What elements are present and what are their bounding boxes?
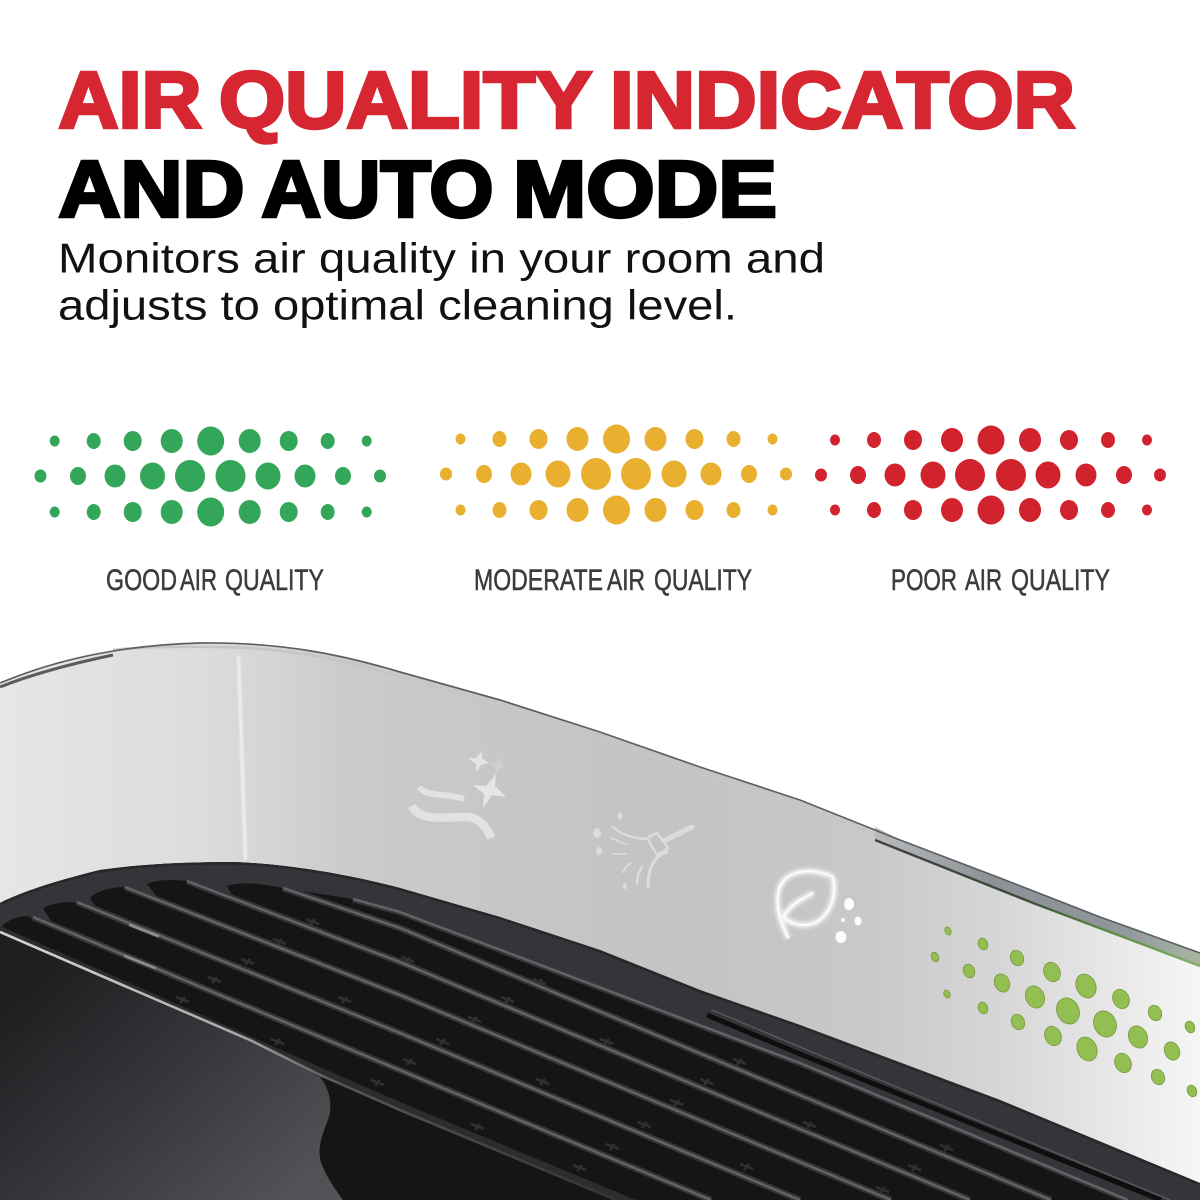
label: moderate air quality: MODERATE: [474, 564, 603, 597]
title line 2: [58, 144, 777, 234]
icon: leaf eco mode: [778, 871, 862, 943]
indicator: good air quality dots: [34, 426, 386, 526]
title line 1: [58, 56, 1075, 144]
green air quality light: [930, 926, 1199, 1098]
label: moderate air quality: AIR: [607, 564, 645, 597]
indicator: poor air quality dots: [815, 426, 1166, 524]
upper wave: [419, 787, 464, 799]
title line 1: INDICATOR: [610, 56, 1075, 144]
label: moderate air quality: [474, 564, 752, 597]
rim left dark segment: [0, 655, 113, 687]
label: moderate air quality: QUALITY: [654, 564, 752, 597]
silver top panel: [0, 643, 1200, 1200]
subtitle: adjusts to optimal cleaning level.: [58, 282, 737, 328]
front panel edge highlight: [0, 932, 616, 1200]
rib fixing marks: [176, 919, 953, 1193]
rim band right: [875, 827, 1200, 966]
front glossy panel: [0, 933, 343, 1200]
label: poor air quality: [891, 564, 1110, 597]
title line 2: MODE: [513, 144, 777, 234]
leaf outline: [778, 871, 834, 938]
grille background: [0, 860, 1200, 1200]
label: poor air quality: QUALITY: [1011, 564, 1110, 597]
grille frame top edge: [0, 862, 1200, 1183]
leaf glow: [778, 871, 834, 938]
title line 1: AIR: [58, 56, 202, 144]
air purifier product photo: [0, 643, 1200, 1200]
small sparkle: [468, 751, 489, 772]
rim inner light band: [113, 647, 875, 835]
large sparkle: [473, 774, 506, 808]
label: good air quality: GOOD: [106, 564, 177, 597]
label: poor air quality: POOR: [891, 564, 957, 597]
grille rib highlights: [33, 881, 1128, 1200]
label: good air quality: AIR: [180, 564, 217, 597]
label: good air quality: QUALITY: [225, 564, 324, 597]
subtitle: [58, 234, 825, 328]
title line 1: QUALITY: [219, 56, 592, 144]
panel light reflection: [237, 656, 247, 860]
frame slit rail: [712, 1010, 1170, 1200]
title line 2: AND: [58, 144, 244, 234]
grille rib bands: [33, 881, 1128, 1200]
faint sparkle: [490, 757, 506, 774]
icon: clean air waves and sparkles: [412, 751, 506, 838]
rib highlight glints: [125, 925, 158, 968]
leaf droplets: [836, 898, 862, 943]
rim inner line right: [875, 840, 1200, 966]
front panel shoulder band: [0, 926, 636, 1200]
title: [58, 56, 1075, 234]
label: good air quality: [106, 564, 324, 597]
title line 2: AUTO: [262, 144, 494, 234]
label: poor air quality: AIR: [965, 564, 1002, 597]
subtitle: Monitors air quality in your room and: [58, 234, 825, 282]
lower wave: [412, 806, 491, 838]
grille frame with rounded slot ends: [0, 862, 1200, 1200]
dark grille body: [0, 860, 1200, 1200]
frame slit: [707, 1015, 1161, 1200]
icon: broom: [593, 812, 692, 889]
rim outer line: [0, 643, 1200, 953]
indicator: moderate air quality dots: [440, 424, 792, 524]
